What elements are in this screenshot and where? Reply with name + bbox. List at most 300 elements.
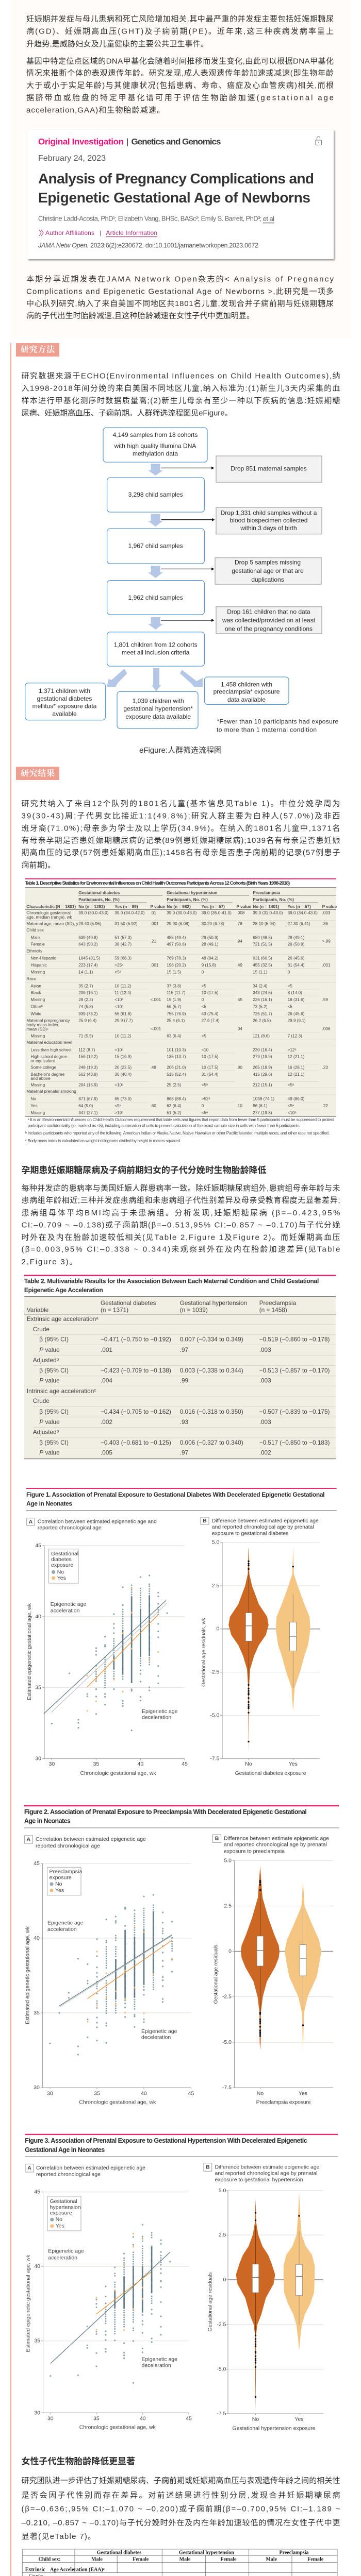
table 1 body: 415 (29.6) — [253, 1072, 272, 1077]
table 1 body: 9 (15.8) — [202, 962, 216, 968]
flow box: drop no blood: blood biospecimen collected — [230, 517, 307, 524]
table 2 body: 0.016 (−0.318 to 0.350) — [180, 1408, 243, 1415]
table 1 body: Chronologic gestational — [26, 910, 71, 915]
table 1 body: 29.9 (9.1) — [288, 1018, 306, 1023]
table 2 body: .002 — [101, 1418, 112, 1426]
table 1 body: 343 (24.5) — [253, 990, 272, 995]
table 1 body: <.001 — [151, 1026, 161, 1031]
table 2 body: 0.003 (−0.338 to 0.344) — [180, 1367, 243, 1374]
table 1 body: 277 (19.8) — [253, 1110, 272, 1115]
table 1 body: 28.10 (5.94) — [253, 921, 276, 926]
table 2 body: .003 — [259, 1377, 271, 1384]
table 1 body: 20 (22.5) — [114, 1065, 132, 1070]
article links: Author Affiliations — [45, 229, 94, 236]
legend: gestational diabetes exposure: No — [57, 1569, 64, 1575]
table 1 header: P value — [236, 904, 251, 909]
figure 1 violin plot — [201, 1539, 320, 1776]
table 1 body: Missing — [30, 1082, 45, 1087]
figure 1 panel B heading — [201, 1517, 319, 1537]
flow box: gestational hypertension — [117, 691, 198, 728]
figure 1 violin plot: No — [245, 1761, 252, 1767]
figure 2 scatter plot: Estimated epigenetic gestational age, wk — [25, 1926, 31, 2024]
table 1 body: 868 (88.4) — [167, 1096, 186, 1101]
intro paragraph 2: 情况来推断个体的表观遗传年龄。研究发现,成人表观遗传年龄加速或减速(即生物年龄 — [26, 69, 334, 77]
flow box: drop no blood: within 3 days of birth — [240, 524, 297, 532]
table 1 body: 0 — [202, 1104, 204, 1108]
subheading: GD and PE: 孕期患妊娠期糖尿病及子痫前期妇女的子代分娩时生物胎龄降低 — [22, 1165, 266, 1175]
article links: Article Information — [106, 229, 157, 236]
table 1 body: 10 (11.2) — [114, 984, 132, 988]
annotation: acceleration: Epigenetic age — [47, 1920, 84, 1926]
publication date: February 24, 2023 — [38, 154, 106, 163]
figure 2 panel A heading: Correlation between estimated epigenetic age — [36, 1836, 146, 1842]
table 1 body: 14 (1.1) — [78, 970, 93, 974]
table 1 body: <5 — [288, 984, 292, 988]
article category: Genetics and Genomics — [131, 137, 221, 146]
table 1 body: 25.4 (6.1) — [167, 1018, 185, 1023]
figure 3 title — [25, 2137, 307, 2154]
figure 3 violin plot: -2.5 — [217, 2321, 226, 2328]
eTable 7 header: Male — [179, 2557, 191, 2563]
figure 1 scatter plot: 40 — [35, 1614, 41, 1620]
table 2 header: (n = 1371) — [101, 1306, 128, 1313]
results paragraph 2: (β=0.003,95% CI:–0.338 ~ 0.344)未观察到外在及内在胎龄加速差异(见Table — [22, 1245, 340, 1254]
flow box: 1,801 — [107, 632, 204, 666]
table 1 body: 12 (21.1) — [288, 1072, 305, 1077]
annotation: acceleration: acceleration — [47, 1926, 77, 1933]
table 2 body: −0.423 (−0.709 to −0.138) — [101, 1367, 171, 1374]
table 1 body: <10ᵃ — [114, 1004, 124, 1009]
flow arrow 4 — [148, 617, 215, 630]
legend: preeclampsia exposure: Yes — [55, 1887, 64, 1893]
article category — [38, 137, 221, 146]
table 1 body: 26 (45.6) — [288, 956, 305, 960]
table 2 body: −0.403 (−0.681 to −0.125) — [101, 1439, 171, 1446]
table 1 body: <10 — [202, 1047, 209, 1052]
table 1 body: 680 (48.5) — [253, 935, 272, 940]
flow box: gestational diabetes: mellitus* exposure data — [32, 703, 97, 710]
table 1 body: 63 (6.4) — [167, 1104, 182, 1108]
table 1 body: 1038 (74.1) — [253, 1096, 274, 1101]
table 1 body: <5 — [202, 984, 206, 988]
table 2 body: β (95% CI) — [39, 1367, 69, 1374]
flow box: drop no data: Drop 161 children that no data — [227, 608, 310, 615]
table 2: multivariable results — [24, 1276, 336, 1459]
results paragraph: 期高血压的记录(57例患妊娠期高血压);1458名有母亲是否患子痫前期的记录(57例患子 — [22, 848, 340, 857]
flow box: gestational diabetes — [25, 683, 106, 720]
results paragraph 3: 显著(见eTable 7)。 — [22, 2532, 95, 2541]
figure 1 violin plot: 2.5 — [212, 1583, 220, 1589]
table 1 body: 10 (17.5) — [202, 1054, 219, 1059]
figure 3 — [25, 2134, 338, 2431]
figure 3 title: Gestational Age in Neonates — [25, 2146, 105, 2154]
flow box: drop no blood — [216, 507, 322, 534]
annotation: acceleration — [51, 1601, 86, 1614]
figure 2 violin plot: No — [257, 2091, 264, 2097]
table 1 body: 206 (16.1) — [78, 990, 98, 995]
table 1 body: 26.2 (6.5) — [253, 1018, 271, 1023]
table 1 body: 25.9 (6.4) — [78, 1018, 97, 1023]
table 1 header: Participants, No. (%) — [253, 897, 294, 902]
table 1 body: 28 (49.1) — [202, 942, 219, 946]
results paragraph 2: 每种并发症的患病率与美国妊娠人群患病率一致。除妊娠期糖尿病组外,患病组母亲年龄与未 — [22, 1184, 340, 1193]
table 1 body: 48 (84.2) — [202, 956, 219, 960]
table 2 body: .003 — [259, 1346, 271, 1353]
intro paragraph 1: 病(GD)、妊娠期高血压(GHT)及子痫前期(PE)。近年来,这三种疾病发病率呈上 — [26, 27, 334, 36]
figure 1 scatter plot: 35 — [35, 1685, 41, 1691]
table 1 body: 31 (54.4) — [288, 962, 305, 968]
table 1 body: 27.6 (7.4) — [202, 1018, 220, 1023]
table 1 body: <10ᵃ — [114, 1082, 124, 1087]
figure 1 panel A heading: reported chronological age — [38, 1525, 102, 1531]
table 1 body: 39.0 (30.0-43.0) — [78, 910, 109, 915]
table 1 body: 8 (14.0) — [288, 990, 302, 995]
flow box: drop maternal — [216, 456, 322, 482]
table 1 body: 25 (2.5) — [167, 1082, 182, 1087]
flow box: preeclampsia: 1,458 children with — [221, 681, 272, 688]
figure 1 scatter plot: 40 — [138, 1761, 143, 1767]
figure 1 violin plot: Gestational age residuals, wk — [201, 1617, 207, 1687]
results paragraph 2: 患病组母体平均BMI均高于未患病组。分析发现,妊娠期糖尿病 (β=–0.423,95% — [22, 1209, 340, 1217]
table 1 body: 28 (49.1) — [288, 935, 305, 940]
table 1 body: 73 (5.2) — [253, 1004, 268, 1009]
table 1 body: 230 (16.4) — [253, 1047, 272, 1052]
table 1 body: 34 (2.4) — [253, 984, 268, 988]
table 1 body: Missing — [30, 1033, 45, 1038]
table 2 header: (n = 1458) — [259, 1306, 287, 1313]
table 2 body: Intrinsic age accelerationᶜ — [27, 1387, 96, 1395]
annotation: deceleration: Epigenetic age — [141, 2356, 177, 2362]
table 2 body: .002 — [259, 1449, 271, 1456]
table 2 body: Adjustedᵇ — [33, 1428, 59, 1435]
annotation: deceleration — [141, 2356, 177, 2368]
table 1 body: Female — [30, 942, 45, 946]
figure 3 violin plot: -5.0 — [217, 2366, 226, 2372]
figure 1 violin plot: -5.0 — [210, 1713, 220, 1719]
table 1 body: 755 (76.9) — [167, 1011, 186, 1016]
caption: eFigure: eFigure:人群筛选流程图 — [139, 746, 222, 755]
flow box: 1,962: 1,962 child samples — [128, 594, 183, 601]
figure 2 panel B heading: exposure to preeclampsia — [224, 1849, 285, 1855]
table 1 body: .01 — [151, 910, 156, 915]
figure 2 title: Figure 2. Association of Prenatal Exposure to Preeclampsia With Decelerated Epigenetic Gestational — [24, 1808, 307, 1816]
table 1 body: 769 (78.3) — [167, 956, 186, 960]
legend: gestational hypertension exposure — [47, 2196, 81, 2231]
table 1 body: 28 (2.2) — [78, 997, 93, 1002]
table 1 body: mean (SD)ᶜ — [26, 1027, 48, 1031]
figure 2 scatter plot: 40 — [141, 2091, 147, 2097]
table 2 body: β (95% CI) — [39, 1408, 69, 1415]
figure 3 violin plot: 2.5 — [219, 2232, 226, 2238]
results paragraph 2: 时外在及内在胎龄加速较低相关(见Table 2,Figure 1及Figure 2)。而妊娠期高血压 — [22, 1232, 340, 1242]
article links: | — [100, 229, 101, 236]
article title — [38, 171, 314, 206]
table 2 body: .003 — [259, 1418, 271, 1426]
figure 2 scatter plot: Chronologic gestational age, wk — [79, 2099, 156, 2105]
methods paragraph: 入1998-2018年间分娩的来自美国不同地区儿童,纳入标准为:(1)新生儿3天内采集的血 — [22, 383, 340, 393]
table 1 body: 65 (73.0) — [114, 1096, 132, 1101]
table 1 body: .008 — [236, 910, 245, 915]
figure 3 panel B heading: and reported chronological age by prenatal — [215, 2171, 318, 2177]
results paragraph: 39(30-43)周;子代男女比接近1:1(49.8%);研究人群主要为白种人(57.0%)及非西 — [22, 811, 340, 820]
table 1 body: 639 (49.8) — [78, 935, 98, 940]
figure 3 scatter plot: 40 — [34, 2263, 40, 2269]
intro paragraph 2: 大于或小于实足年龄)与其健康状况(包括患病、寿命、癌症及心血管疾病)相关,而根 — [26, 80, 334, 90]
table 2 body: P — [39, 1377, 43, 1384]
table 1 body: 39.0 (31.0-43.0) — [253, 910, 283, 915]
figure 1 scatter plot: Estimated epigenetic gestational age, wk — [26, 1603, 32, 1700]
table 2 body: Adjustedᵇ — [33, 1357, 59, 1364]
eTable 7 header — [38, 2550, 324, 2563]
table 2 body: .005 — [101, 1449, 112, 1456]
table 1 body: 71 (5.5) — [78, 1033, 93, 1038]
table 1 body: >10ᵃ — [114, 1047, 124, 1052]
table 2 body: P — [39, 1346, 43, 1353]
results paragraph 2: 患病组年龄相近;三种并发症患病组和未患病组子代性别差异及母亲受教育程度无显著差异; — [22, 1196, 340, 1205]
figure 1 violin plot: 0 — [217, 1626, 220, 1632]
flowchart: population selection — [25, 428, 339, 734]
figure 3 panel B heading: B — [206, 2164, 210, 2170]
figure 3 scatter plot: 30 — [47, 2415, 54, 2421]
figure 2 scatter plot: 35 — [94, 2091, 100, 2097]
intro paragraph 3 — [26, 275, 334, 320]
figure 3 panel A heading: A — [27, 2165, 31, 2171]
intro paragraph 2: 据脐带血或胎盘的特定甲基化谱可用于评估生物胎龄加速(gestational age — [26, 93, 334, 102]
table 1 body: 15 (16.9) — [114, 1054, 132, 1059]
table 2 body: .97 — [180, 1449, 188, 1456]
figure 2 panel A heading: reported chronological age — [36, 1843, 100, 1849]
table 1 body: 29.40 (5.95) — [78, 921, 102, 926]
table 1 body: 30.20 (6.73) — [202, 921, 224, 926]
figure 2 violin plot: -2.5 — [222, 1994, 232, 2000]
flow box: preeclampsia — [204, 677, 289, 704]
table 1 body: .001 — [151, 921, 159, 926]
figure 2 scatter plot: 45 — [34, 1860, 40, 1867]
flow box: gestational diabetes: gestational diabetes — [37, 695, 92, 702]
results paragraph 2: 2,Figure 3)。 — [22, 1258, 77, 1266]
figure 2 violin plot: Gestational age residuals — [212, 1944, 219, 2004]
figure 1 panel A heading: Correlation between estimated epigenetic age and — [38, 1519, 157, 1525]
legend: gestational hypertension exposure: No — [56, 2216, 62, 2223]
table 1 body: 15 (1.1) — [253, 970, 268, 974]
table 1 header: No (n = 982) — [167, 904, 191, 909]
figure 2 scatter plot: 30 — [34, 2084, 40, 2091]
results paragraph — [22, 799, 340, 870]
table 1 body: 86 (6.1) — [253, 1104, 268, 1108]
table 1 body: 562 (43.8) — [78, 1072, 98, 1077]
flow box: drop no blood: Drop 1,331 child samples without a — [221, 509, 317, 516]
table 1 body: 121 (8.6) — [253, 1033, 270, 1038]
table 1 body: Maternal age, mean (SD), y — [26, 921, 79, 926]
figure 3 violin plot: Gestational hypertension exposure — [232, 2425, 316, 2431]
table 1 body: <10ᵃ — [114, 997, 124, 1002]
figure 3 scatter plot: 45 — [34, 2189, 40, 2195]
table 1 body: 1045 (81.5) — [78, 956, 100, 960]
table 1 body: Maternal prenatal smoking — [26, 1089, 76, 1094]
table 1 body: Maternal prepregnancy — [26, 1018, 70, 1023]
table 1 body: <.001 — [151, 997, 161, 1002]
table 1 body: Yes — [30, 1104, 38, 1108]
legend: gestational hypertension exposure: Gestational — [50, 2198, 77, 2205]
eTable 7 extrinsic rows: Extrinsic Age Acceleration (EAA)ᵃ — [25, 2567, 105, 2572]
results paragraph 3 — [22, 2476, 340, 2541]
table 1 body: 43 (75.4) — [202, 1011, 219, 1016]
legend: preeclampsia exposure: exposure — [50, 1875, 72, 1881]
table 1 body: 156 (12.2) — [78, 1054, 98, 1059]
table 2 body: −0.471 (−0.750 to −0.192) — [101, 1335, 171, 1343]
table 1 body: No — [30, 1096, 36, 1101]
table 2 body: 0.006 (−0.327 to 0.340) — [180, 1439, 243, 1446]
annotation: deceleration: Epigenetic age — [142, 1708, 178, 1715]
article title: Epigenetic Gestational Age of Newborns — [38, 190, 310, 206]
table 1 body: High school degree — [30, 1054, 67, 1059]
figure 3 violin plot: 5.0 — [219, 2188, 226, 2194]
results paragraph 3: –0.210, –0.857 ~ –0.170)与子代分娩时外在及内在年龄加速较低的情况在女性子代中更 — [22, 2518, 340, 2527]
table 1 body: .001 — [151, 962, 159, 968]
table 1 body: 39.0 (30.0-43.0) — [167, 910, 197, 915]
flow box: 3,298 — [107, 478, 204, 512]
figure 2 title: Age in Neonates — [24, 1818, 71, 1825]
table 1 body: 10 (11.2) — [114, 1033, 132, 1038]
table 1 body: Missing — [30, 970, 45, 974]
intro paragraph 3: 本期分享近期发表在JAMA Network Open杂志的< Analysis of Pregnancy — [26, 275, 334, 284]
table 1 body: <10ᵃ — [288, 1110, 297, 1115]
figure 3 panel A heading: reported chronological age — [36, 2172, 101, 2178]
table 1 body: 206 (21.0) — [167, 1065, 186, 1070]
table 1 body: 74 (5.8) — [78, 1004, 93, 1009]
table 1 body: 265 (18.9) — [253, 1065, 272, 1070]
table 1 body: 27.30 (6.41) — [288, 921, 310, 926]
figure 1 violin plot: Gestational diabetes exposure — [235, 1770, 306, 1776]
eTable 7 header: Gestational diabetes — [97, 2550, 141, 2555]
table 1 body: >19ᵃ — [114, 1110, 124, 1115]
table 1 footnotes: participant confidentiality (ie, marked as <5), including summation of cells to prevent calculation of the exact sample size in cells with fewer than 5 participants. — [28, 1123, 301, 1128]
figure 1 panel B heading: B — [203, 1518, 207, 1524]
table 1 body: or equivalent — [30, 1059, 55, 1063]
results paragraph 2 — [22, 1184, 340, 1266]
legend: gestational diabetes exposure: Yes — [57, 1575, 66, 1581]
table 1 body: 38 (42.7) — [114, 942, 132, 946]
table 1 body: Otherᵇ — [30, 1004, 43, 1009]
table 1 body: >25ᵃ — [114, 962, 124, 968]
table 2 body: .93 — [180, 1418, 189, 1426]
table 1 header: Participants, No. (%) — [78, 897, 120, 902]
table 2 body: −0.434 (−0.705 to −0.162) — [101, 1408, 171, 1415]
article category: Original Investigation — [38, 137, 124, 146]
table 1 body: 931 (66.5) — [253, 956, 272, 960]
table 1 body: Maternal education level — [26, 1040, 72, 1045]
figure 2 violin plot: -5.0 — [222, 2039, 232, 2045]
table 1 body: Less than high school — [30, 1047, 72, 1052]
table 1 body: 101 (10.3) — [167, 1047, 186, 1052]
eTable 7: sex-stratified results — [22, 2549, 337, 2576]
table 2 header: Preeclampsia — [259, 1299, 297, 1307]
figure 1 title: Figure 1. Association of Prenatal Exposure to Gestational Diabetes With Decelerated Epigenetic Gestational — [26, 1491, 325, 1498]
table 1 body: Black — [30, 990, 41, 995]
legend: preeclampsia exposure: No — [55, 1881, 62, 1887]
flow box: 1,967: 1,967 child samples — [128, 543, 183, 550]
intro paragraph 2 — [26, 57, 334, 114]
table 1 footnotes: ᵃ It is an Environmental Influences on Child Health Outcomes requirement that table cells and figures that report data from fewer than 5 participants must be suppressed to protect — [28, 1117, 334, 1122]
table 1 body: 0 — [202, 970, 204, 974]
table 1 body: age, median (range), wk — [26, 915, 72, 920]
table 1 body: 10 (17.5) — [202, 990, 219, 995]
eTable 7 header: Preeclampsia — [279, 2550, 309, 2555]
table 1 body: 226 (16.1) — [253, 997, 272, 1002]
annotation: acceleration: acceleration — [48, 2255, 77, 2261]
flow box: drop missing age: duplications — [251, 576, 284, 583]
flow box: gestational diabetes: available — [52, 710, 77, 718]
table 1 body: 18 (31.6) — [288, 997, 305, 1002]
table 2 body: Extrinsic age accelerationᵃ — [27, 1315, 99, 1323]
table 1 body: 198 (20.2) — [167, 962, 186, 968]
figure 3 title: Figure 3. Association of Prenatal Exposure to Gestational Hypertension With Decelerated Epigenetic — [25, 2137, 307, 2144]
table 1 body: 347 (27.1) — [78, 1110, 98, 1115]
table 1 body: Child sex — [26, 928, 44, 933]
table 2 header: Gestational diabetes — [101, 1299, 156, 1307]
table 1 header: Gestational diabetes — [78, 890, 120, 895]
table 1 header: P value — [322, 904, 337, 909]
figure 2 violin plot: 2.5 — [224, 1903, 232, 1909]
figure 1 panel A heading — [27, 1518, 157, 1531]
table 1 body: 29.90 (6.08) — [167, 921, 190, 926]
figure 1 scatter plot: 45 — [182, 1761, 188, 1767]
flow box: drop missing age — [215, 558, 321, 584]
table 1 header — [26, 890, 337, 909]
intro paragraph 2: acceleration,GAA)和生物胎龄减速。 — [26, 106, 165, 114]
table 1 header: Participants, No. (%) — [167, 897, 208, 902]
table 1 body: Non-Hispanic — [30, 956, 56, 960]
table 1 body: .49 — [236, 962, 242, 968]
figure 1 scatter plot: Chronologic gestational age, wk — [80, 1770, 156, 1776]
table 1 header: Characteristic (N = 1801) — [26, 904, 76, 909]
table 2 body: value — [43, 1346, 60, 1353]
table 1 body: 59 (66.3) — [114, 956, 132, 960]
table 1 body: 55 (61.8) — [114, 1011, 132, 1016]
table 1 body: 7 (12.3) — [288, 1033, 302, 1038]
intro paragraph 3: 中心队列研究,纳入了来自美国不同地区共1801名儿童,发现合并子痫前期与妊娠期糖尿 — [26, 299, 334, 308]
flow box: gestational hypertension: gestational hypertension* — [123, 705, 193, 713]
eTable 7 header: Male — [266, 2557, 277, 2563]
table 2 body: .99 — [180, 1377, 188, 1384]
table 1 body: 16 (28.1) — [288, 1065, 305, 1070]
intro paragraph 2: 基因中特定位点区域的DNA甲基化会随着时间推移而发生变化,由此可以根据DNA甲基化 — [26, 57, 334, 66]
article category: | — [126, 137, 128, 146]
results paragraph 3: 研究团队进一步评估了妊娠期糖尿病、子痫前期或妊娠期高血压与表观遗传年龄之间的相关性 — [22, 2476, 340, 2485]
table 1 body: <5 — [202, 1004, 206, 1009]
figure 2 violin plot: Preeclampsia exposure — [256, 2099, 311, 2105]
legend: gestational hypertension exposure: exposure — [50, 2210, 72, 2216]
figure 3 panel B heading: Difference between estimate epigenetic age — [215, 2164, 320, 2170]
table 1 body: 19 (1.9) — [167, 997, 182, 1002]
table 1 body: .22 — [322, 1104, 328, 1108]
table 2 body — [27, 1315, 330, 1456]
flow box: all samples: methylation data — [133, 450, 178, 457]
figure 1 scatter plot: 30 — [35, 1756, 41, 1762]
table 1 body: 37 (3.8) — [167, 984, 182, 988]
legend: gestational diabetes exposure: diabetes — [51, 1556, 72, 1563]
table 1 body: Bachelor's degree — [30, 1072, 65, 1077]
eTable 7 header: Gestational hypertension — [179, 2550, 234, 2555]
table 2 body: value — [43, 1418, 60, 1426]
results paragraph: 痫前期)。 — [22, 861, 55, 870]
figure 1 title — [26, 1491, 325, 1507]
table 1 body: .80 — [236, 1065, 242, 1070]
icon: open lock — [316, 137, 322, 145]
article links — [39, 229, 157, 236]
annotation: deceleration — [141, 2028, 177, 2041]
table 1 body: 115 (11.7) — [167, 990, 186, 995]
